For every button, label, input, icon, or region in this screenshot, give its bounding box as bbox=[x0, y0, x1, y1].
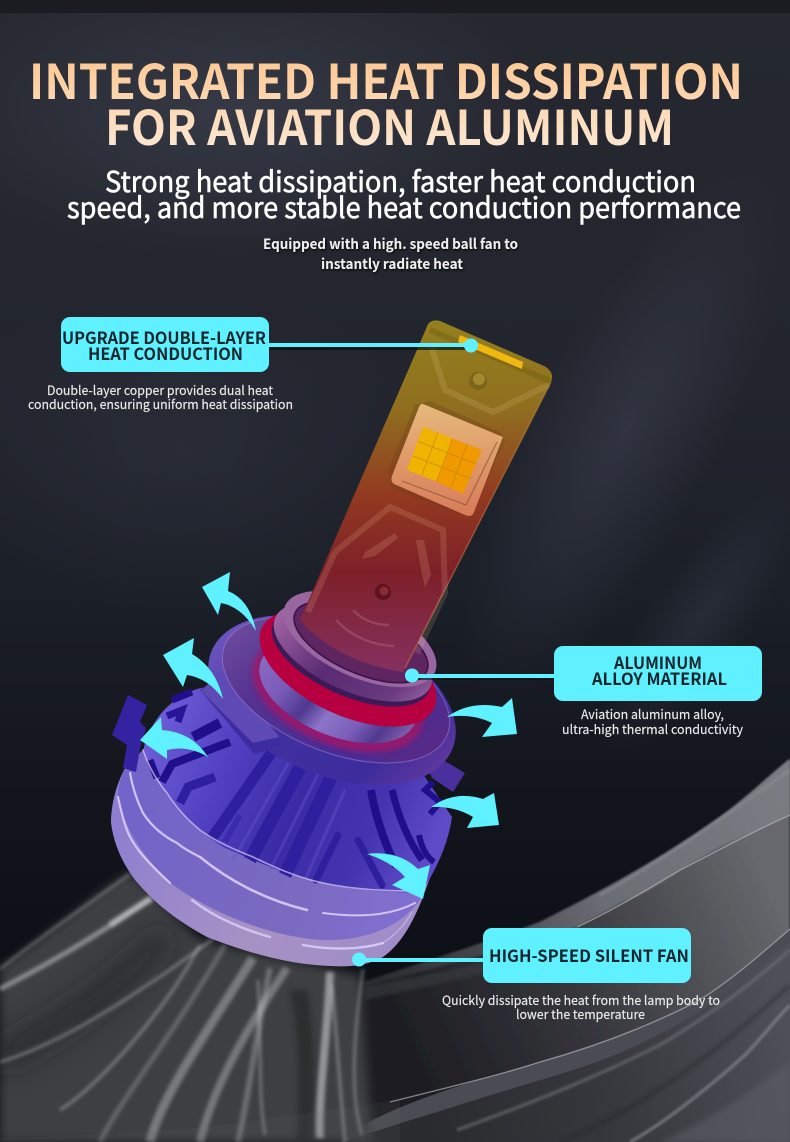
heat arrows on blade bbox=[362, 533, 431, 587]
callout: high-speed silent fan: lower the temperature bbox=[516, 1004, 645, 1023]
callout: aluminum alloy material: Aviation aluminum alloy, bbox=[581, 704, 724, 723]
blade bbox=[300, 320, 552, 672]
callout: aluminum alloy material bbox=[405, 646, 762, 738]
neck bbox=[236, 615, 440, 775]
subtitle: speed, and more stable heat conduction performance bbox=[67, 186, 741, 227]
background: right metallic swooshes bbox=[340, 759, 790, 1142]
subtitle: Strong heat dissipation, faster heat conduction bbox=[105, 160, 696, 201]
dark left fins bbox=[150, 692, 230, 782]
arrow: right middle bbox=[431, 793, 499, 828]
red sealing ring bbox=[242, 585, 454, 751]
title: INTEGRATED HEAT DISSIPATION bbox=[29, 43, 743, 113]
arrow: up left top bbox=[202, 572, 256, 631]
subtitle bbox=[67, 160, 741, 227]
left connector tab bbox=[112, 695, 147, 772]
fan note bbox=[263, 234, 518, 274]
callout: high-speed silent fan: Quickly dissipate the heat from the lamp body to bbox=[442, 990, 720, 1009]
background: smoke streaks under lamp bbox=[0, 872, 400, 1142]
callout: upgrade double-layer heat conduction: conduction, ensuring uniform heat dissipation bbox=[28, 394, 293, 413]
callout: aluminum alloy material: ALUMINUM bbox=[613, 649, 702, 674]
callout: upgrade double-layer heat conduction: HEAT CONDUCTION bbox=[88, 340, 243, 365]
dark right fins bbox=[371, 782, 440, 866]
callout: upgrade double-layer heat conduction: Double-layer copper provides dual heat bbox=[47, 380, 273, 399]
title: FOR AVIATION ALUMINUM bbox=[105, 89, 674, 159]
callout: high-speed silent fan bbox=[352, 928, 720, 1023]
heatsink highlight lines bbox=[118, 750, 420, 949]
callout: aluminum alloy material: ultra-high thermal conductivity bbox=[562, 719, 743, 738]
LED chip bbox=[388, 401, 505, 518]
screws bbox=[375, 372, 487, 600]
arrow: right upper bbox=[447, 698, 517, 737]
callout: upgrade double-layer heat conduction: UPGRADE DOUBLE-LAYER bbox=[62, 324, 266, 349]
heat flow arrows bbox=[140, 572, 517, 899]
heatsink lower band bbox=[111, 750, 452, 966]
flange bbox=[183, 582, 481, 818]
fan note: instantly radiate heat bbox=[321, 254, 463, 274]
fan note: Equipped with a high. speed ball fan to bbox=[263, 234, 518, 254]
right connector tab bbox=[427, 760, 465, 792]
bulb illustration bbox=[111, 320, 552, 966]
callout: high-speed silent fan: HIGH-SPEED SILENT FAN bbox=[489, 942, 689, 967]
callout: aluminum alloy material: ALLOY MATERIAL bbox=[591, 665, 727, 690]
heatsink fins bbox=[143, 687, 452, 893]
LED slot bbox=[458, 335, 523, 369]
title bbox=[29, 43, 743, 159]
arrow: lower right bbox=[367, 853, 430, 899]
arrow: left connector bbox=[140, 717, 208, 759]
collar bbox=[257, 571, 450, 727]
center fins bbox=[212, 752, 382, 885]
callout: upgrade double-layer heat conduction bbox=[28, 317, 478, 413]
arrow: up left middle bbox=[163, 638, 223, 699]
